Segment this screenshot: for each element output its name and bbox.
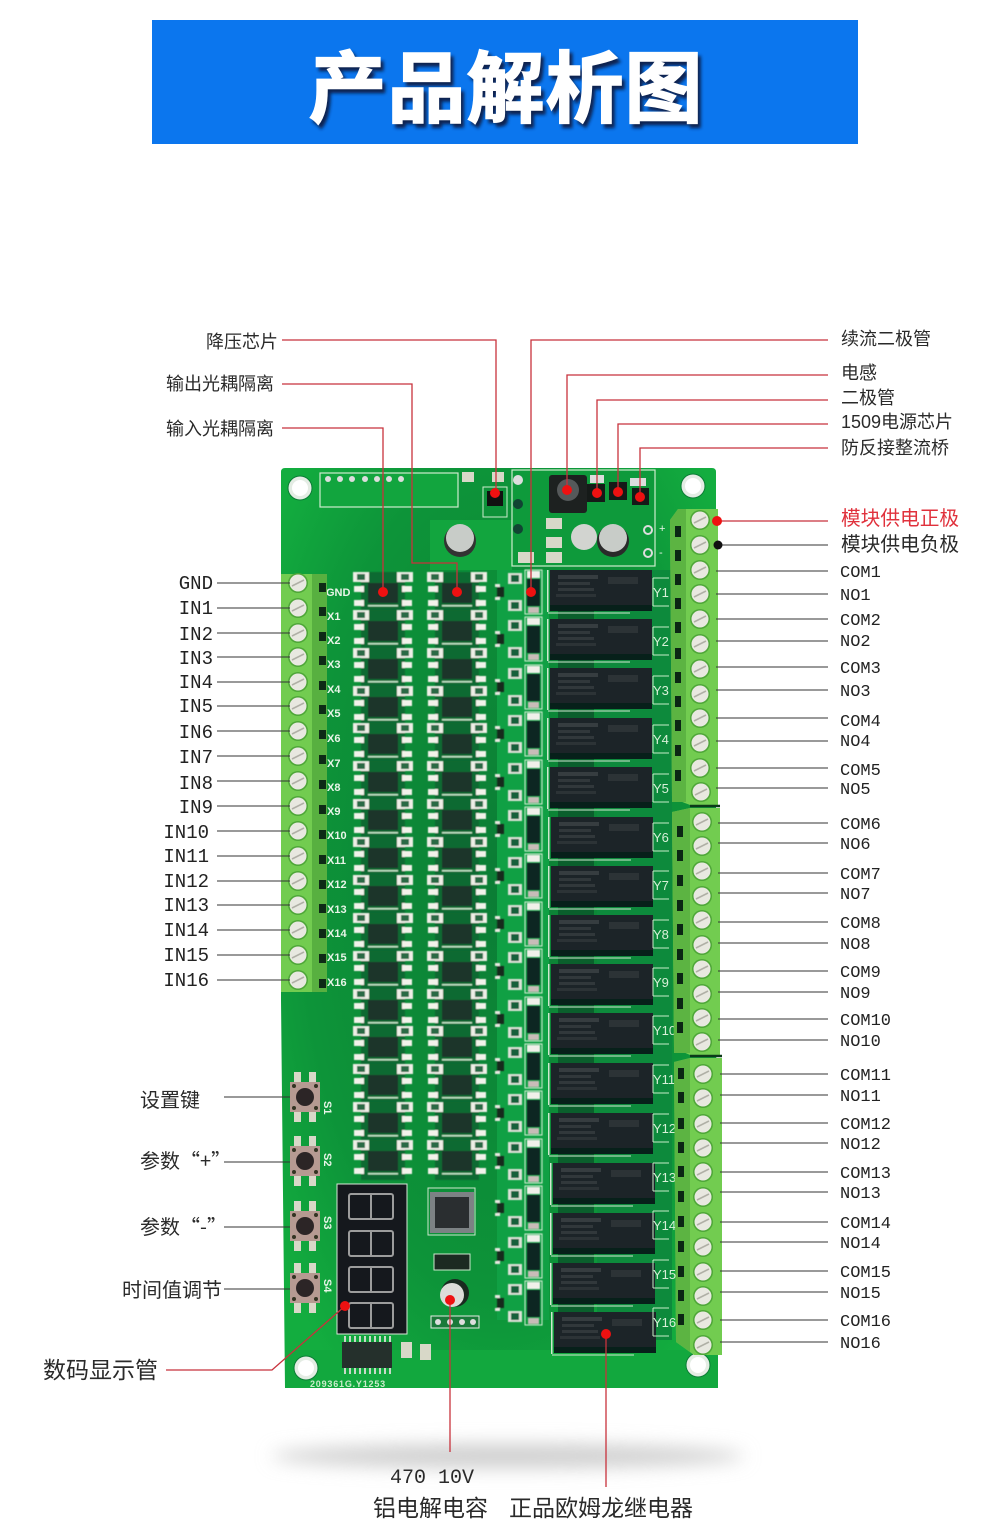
callout: supply positive: 模块供电正极: [841, 508, 959, 530]
push buttons: [290, 1072, 333, 1313]
output terminal labels: COM5: [840, 762, 881, 781]
output terminal labels: NO15: [840, 1285, 881, 1304]
button labels: 参数“+”: [140, 1145, 231, 1174]
output terminal labels: COM4: [840, 713, 881, 732]
relay labels: Y6: [653, 830, 669, 845]
mounting holes: [288, 474, 710, 1380]
callout: output optocoupler: 输出光耦隔离: [166, 374, 274, 394]
relay labels: Y7: [653, 878, 669, 893]
input silk labels: GND: [326, 587, 350, 599]
input silk labels: X11: [327, 855, 346, 867]
input terminal block: [281, 573, 327, 992]
callout: digital display: 数码显示管: [43, 1357, 158, 1383]
callout: diode: 二极管: [841, 388, 895, 408]
input silk labels: X16: [327, 977, 347, 989]
output terminal labels: NO5: [840, 781, 871, 800]
callout: flyback diode: [526, 329, 931, 597]
button labels: [122, 1089, 290, 1302]
relay labels: Y1: [653, 585, 669, 600]
input silk labels: X9: [327, 806, 340, 818]
input terminal labels: IN12: [163, 871, 209, 893]
callout: electrolytic capacitor: 铝电解电容: [373, 1495, 488, 1521]
optocoupler columns: [353, 572, 487, 1180]
callout: supply negative: 模块供电负极: [841, 534, 959, 556]
title banner: [152, 20, 858, 144]
output terminal labels: NO11: [840, 1088, 881, 1107]
relay labels: [653, 578, 676, 1336]
input silk labels: X14: [327, 928, 347, 940]
input terminal labels: [163, 573, 290, 992]
input silk labels: X12: [327, 879, 347, 891]
relay labels: Y4: [653, 732, 669, 747]
output terminal labels: NO7: [840, 886, 871, 905]
output terminal labels: NO13: [840, 1185, 881, 1204]
output terminal labels: [716, 564, 891, 1354]
output terminal labels: NO1: [840, 587, 871, 606]
flyback diode column: [495, 570, 542, 1325]
seven segment display: [337, 1184, 407, 1334]
callout: 1509 power chip: [613, 412, 953, 497]
input terminal labels: IN3: [179, 648, 213, 670]
output terminal labels: COM11: [840, 1067, 891, 1086]
input terminal labels: IN9: [179, 797, 213, 819]
output terminal labels: COM8: [840, 915, 881, 934]
output terminal labels: COM6: [840, 816, 881, 835]
output terminal labels: NO2: [840, 633, 871, 652]
input silk labels: [326, 587, 350, 989]
relay labels: Y10: [653, 1023, 676, 1038]
callout: buck chip: [206, 332, 500, 498]
power section: +: [659, 523, 665, 535]
callout: reverse protection bridge: [635, 438, 949, 502]
output terminal labels: COM3: [840, 660, 881, 679]
input terminal labels: IN2: [179, 624, 213, 646]
input terminal labels: IN6: [179, 722, 213, 744]
input silk labels: X4: [327, 684, 341, 696]
input silk labels: X6: [327, 733, 340, 745]
input silk labels: X2: [327, 635, 340, 647]
output terminal labels: COM14: [840, 1215, 891, 1234]
button labels: 时间值调节: [122, 1279, 222, 1302]
input terminal labels: IN16: [163, 970, 209, 992]
callout: inductor: [562, 363, 877, 495]
output terminal labels: COM13: [840, 1165, 891, 1184]
input silk labels: X13: [327, 904, 347, 916]
callout: digital display: [43, 1301, 350, 1383]
input terminal labels: IN11: [163, 846, 209, 868]
power section: -: [659, 547, 663, 559]
header silk box: [320, 473, 458, 507]
relay labels: Y12: [653, 1121, 676, 1136]
relay labels: Y2: [653, 634, 669, 649]
relay labels: Y13: [653, 1170, 676, 1185]
input silk labels: X8: [327, 782, 340, 794]
title heading: 产品解析图: [311, 31, 707, 143]
relay labels: Y11: [653, 1072, 675, 1087]
input terminal labels: IN4: [179, 672, 213, 694]
power section: [430, 470, 665, 570]
push buttons: S3: [321, 1216, 333, 1229]
callout: 1509 power chip: 1509电源芯片: [841, 412, 953, 432]
output terminal block: [670, 509, 722, 1355]
callout: supply negative: [714, 534, 959, 556]
input silk labels: X1: [327, 611, 340, 623]
output terminal labels: NO3: [840, 683, 871, 702]
input terminal labels: GND: [179, 573, 213, 595]
driver chip: [342, 1339, 431, 1371]
push buttons: S1: [321, 1101, 333, 1114]
output terminal labels: COM10: [840, 1012, 891, 1031]
callout: input optocoupler: [166, 419, 388, 597]
button labels: 参数“-”: [140, 1211, 227, 1240]
output terminal labels: NO9: [840, 985, 871, 1004]
input silk labels: X10: [327, 830, 347, 842]
relay labels: Y15: [653, 1267, 676, 1282]
callout: buck chip: 降压芯片: [206, 332, 278, 352]
push buttons: S4: [321, 1279, 333, 1293]
board marking: 209361G.Y1253: [310, 1379, 386, 1389]
input silk labels: X15: [327, 952, 347, 964]
relay labels: Y8: [653, 927, 669, 942]
callout: diode: [592, 388, 895, 498]
output terminal labels: COM1: [840, 564, 881, 583]
inductor: [549, 475, 587, 513]
input terminal labels: IN5: [179, 696, 213, 718]
relays: [547, 570, 656, 1355]
output terminal labels: COM9: [840, 964, 881, 983]
input terminal labels: IN1: [179, 598, 213, 620]
output terminal labels: NO14: [840, 1235, 881, 1254]
output terminal labels: NO16: [840, 1335, 881, 1354]
callout: input optocoupler: 输入光耦隔离: [166, 419, 274, 439]
relay labels: Y16: [653, 1315, 676, 1330]
title heading: 产品解析图: [308, 27, 704, 139]
input silk labels: X3: [327, 659, 340, 671]
callout: output optocoupler: [166, 374, 462, 597]
output terminal labels: NO4: [840, 733, 871, 752]
output terminal labels: NO12: [840, 1136, 881, 1155]
output terminal labels: COM2: [840, 612, 881, 631]
callout: flyback diode: 续流二极管: [841, 329, 931, 349]
microcontroller: [428, 1188, 475, 1235]
relay labels: Y9: [653, 975, 669, 990]
input terminal labels: IN8: [179, 773, 213, 795]
input terminal labels: IN7: [179, 747, 213, 769]
input terminal labels: IN10: [163, 822, 209, 844]
button labels: 设置键: [140, 1089, 200, 1112]
electrolytic capacitor: [431, 1254, 479, 1328]
output terminal labels: NO6: [840, 836, 871, 855]
output terminal labels: NO10: [840, 1033, 881, 1052]
input terminal labels: IN14: [163, 920, 209, 942]
callout: omron relay: 正品欧姆龙继电器: [509, 1495, 693, 1521]
circuit board: [281, 468, 718, 1389]
relay labels: Y5: [653, 781, 669, 796]
input terminal labels: IN13: [163, 895, 209, 917]
output terminal labels: COM12: [840, 1116, 891, 1135]
capacitors: [444, 524, 629, 557]
board shadow: [272, 1444, 744, 1468]
input silk labels: X5: [327, 708, 340, 720]
output terminal labels: COM16: [840, 1313, 891, 1332]
input terminal labels: IN15: [163, 945, 209, 967]
output terminal labels: COM7: [840, 866, 881, 885]
output terminal labels: NO8: [840, 936, 871, 955]
callout: electrolytic capacitor: 470 10V: [390, 1467, 474, 1490]
callout: omron relay: [509, 1329, 693, 1521]
output terminal labels: COM15: [840, 1264, 891, 1283]
input silk labels: X7: [327, 758, 340, 770]
relay labels: Y14: [653, 1218, 676, 1233]
callout: supply positive: [712, 508, 959, 530]
callout: electrolytic capacitor: [373, 1295, 488, 1521]
relay labels: Y3: [653, 683, 669, 698]
callout: inductor: 电感: [841, 363, 877, 383]
callout: reverse protection bridge: 防反接整流桥: [841, 438, 949, 458]
push buttons: S2: [321, 1153, 333, 1166]
